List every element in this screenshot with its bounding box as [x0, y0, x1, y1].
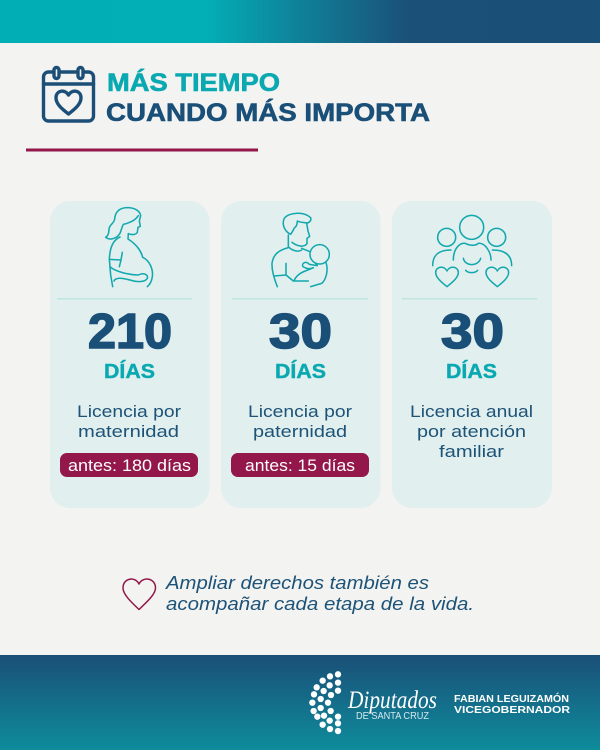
logo wordmark: Diputados [347, 687, 437, 714]
panel: maternity: Licencia por [77, 402, 181, 421]
logo wordmark [347, 687, 437, 722]
title [106, 68, 430, 127]
vice governor name [454, 692, 570, 716]
icon: heart [123, 579, 156, 610]
badge: before 15 days: antes: 15 días [245, 456, 355, 475]
icon: family with hearts [433, 215, 512, 287]
vice governor name: FABIAN LEGUIZAMÓN [454, 692, 569, 705]
footer band [0, 655, 600, 750]
panel: paternity: paternidad [253, 422, 347, 441]
panel: family care: familiar [439, 442, 504, 461]
icon: calendar with heart [44, 68, 94, 121]
badge: before 180 days: antes: 180 días [68, 456, 191, 475]
title: CUANDO MÁS IMPORTA [106, 98, 430, 127]
closing message [165, 573, 474, 614]
panel: maternity: 210 [88, 305, 172, 359]
panel: paternity: 30 [269, 305, 332, 359]
icon: father holding baby [272, 213, 329, 287]
icon: dotted logo [309, 671, 341, 734]
panel: maternity [50, 201, 210, 508]
panel: paternity: DÍAS [275, 360, 326, 383]
badge: before 15 days [231, 453, 369, 477]
title: MÁS TIEMPO [107, 68, 280, 97]
panel: paternity: Licencia por [248, 402, 352, 421]
panel: maternity: DÍAS [104, 360, 155, 383]
badge: before 180 days [60, 453, 198, 477]
vice governor name: VICEGOBERNADOR [454, 704, 570, 716]
top banner [0, 0, 600, 43]
panel: family care: 30 [441, 305, 504, 359]
logo wordmark: DE SANTA CRUZ [356, 711, 429, 722]
panel: family care [392, 201, 552, 508]
closing message: Ampliar derechos también es [165, 573, 429, 593]
closing message: acompañar cada etapa de la vida. [166, 594, 474, 614]
panel: family care: Licencia anual [410, 402, 533, 421]
panel: paternity [221, 201, 380, 508]
panel: maternity: maternidad [78, 422, 179, 441]
icon: pregnant woman [106, 208, 153, 287]
panel: family care: por atención [417, 422, 526, 441]
panel: family care: DÍAS [446, 360, 497, 383]
title underline [26, 148, 258, 152]
